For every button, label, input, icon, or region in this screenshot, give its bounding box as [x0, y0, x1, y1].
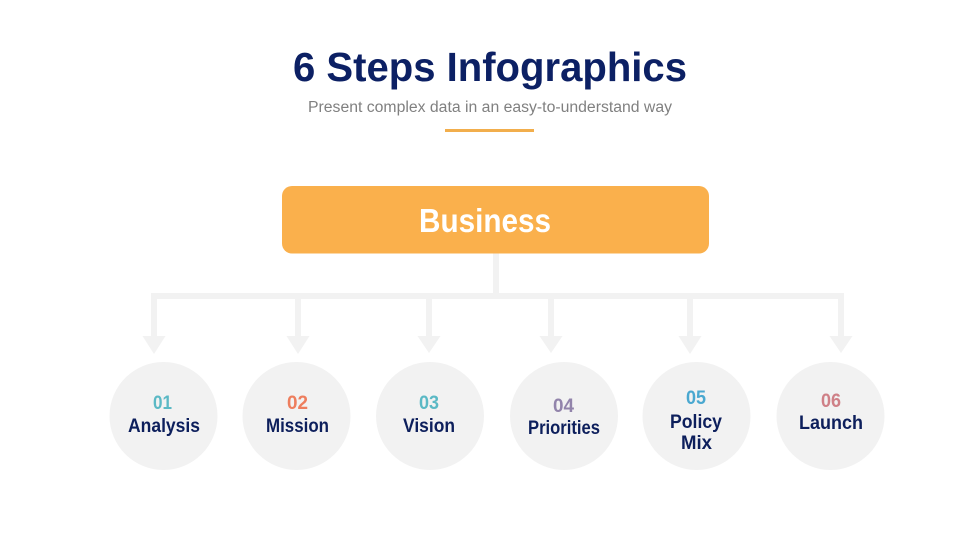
- step 5: policy mix: Mix: [681, 433, 712, 454]
- step 4: priorities: 04: [553, 396, 574, 417]
- step 6: launch: [776, 362, 884, 470]
- step 4: priorities: [510, 362, 618, 470]
- step 5: policy mix: Policy: [670, 412, 722, 433]
- step 6: launch: Launch: [799, 413, 863, 434]
- step 2: mission: [242, 362, 350, 470]
- business label: Business: [419, 202, 551, 239]
- step 3: vision: Vision: [403, 416, 455, 437]
- title: 6 Steps Infographics: [293, 44, 687, 90]
- step 5: policy mix: 05: [686, 388, 706, 409]
- arrow to step 6: [830, 296, 852, 353]
- step 6: launch: 06: [821, 391, 841, 412]
- step 2: mission: 02: [287, 393, 308, 414]
- step 1: analysis: [110, 362, 218, 470]
- step 1: analysis: 01: [153, 393, 172, 414]
- arrow to step 3: [418, 296, 440, 353]
- arrow to step 4: [540, 296, 562, 353]
- subtitle: Present complex data in an easy-to-understand way: [308, 99, 672, 116]
- arrow to step 2: [286, 296, 310, 354]
- step 2: mission: Mission: [266, 416, 329, 437]
- step 3: vision: 03: [419, 393, 439, 414]
- arrow to step 1: [142, 296, 166, 354]
- title underline accent: [445, 129, 534, 132]
- arrow to step 5: [678, 296, 702, 354]
- connector tree with arrows: [142, 253, 852, 354]
- step 4: priorities: Priorities: [528, 418, 600, 439]
- step 1: analysis: Analysis: [128, 416, 200, 437]
- business box: [282, 186, 709, 254]
- step 3: vision: [376, 362, 484, 470]
- step 5: policy mix: [642, 362, 750, 470]
